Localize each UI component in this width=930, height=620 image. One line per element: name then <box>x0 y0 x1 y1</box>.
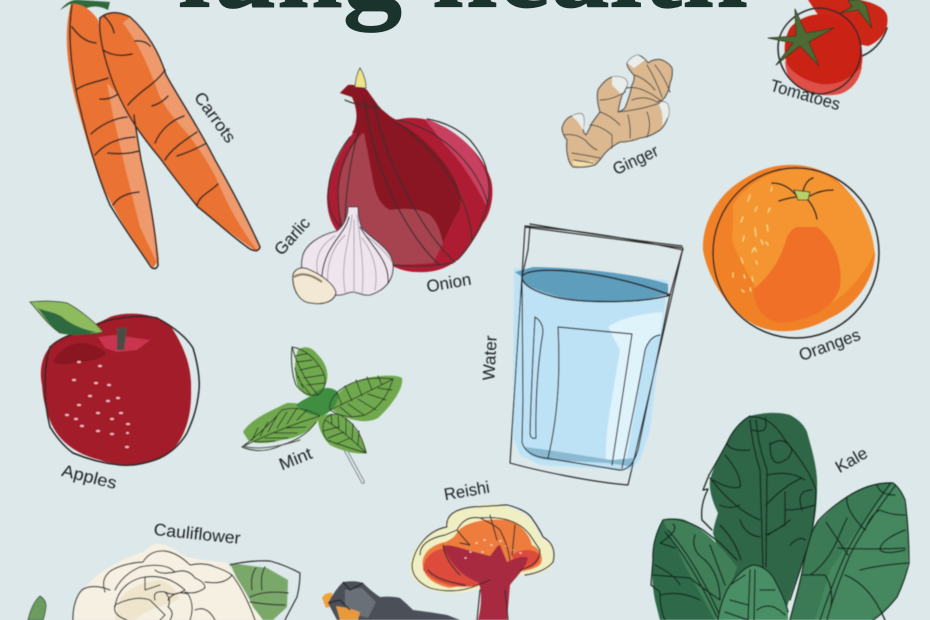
food: glass of water <box>479 224 683 485</box>
food: dark root <box>322 581 460 620</box>
label: Reishi: Reishi <box>443 478 491 504</box>
label: Kale: Kale <box>832 443 871 477</box>
food: tomatoes <box>768 0 887 114</box>
label: Oranges: Oranges <box>796 325 863 365</box>
food: kale <box>651 413 909 620</box>
calyx <box>768 9 834 66</box>
food: onion <box>327 68 492 296</box>
food: garlic <box>270 207 393 304</box>
food: apple <box>30 301 199 493</box>
food: orange <box>703 165 879 365</box>
label: Water: Water <box>479 335 501 381</box>
label: Tomatoes: Tomatoes <box>768 76 843 114</box>
label: Ginger: Ginger <box>610 141 662 179</box>
food: reishi mushroom <box>410 478 554 620</box>
small leaf at bottom-left <box>28 596 46 620</box>
label: Onion: Onion <box>425 270 473 296</box>
label: Garlic: Garlic <box>270 213 314 259</box>
label: Apples: Apples <box>60 461 119 493</box>
mint leaf edge <box>243 440 300 448</box>
label: Mint: Mint <box>276 444 315 474</box>
food: mint <box>242 347 402 482</box>
food: carrots <box>60 0 261 269</box>
food: ginger <box>562 55 672 179</box>
food: cauliflower <box>28 520 300 620</box>
onion tip <box>355 68 366 88</box>
label: Cauliflower: Cauliflower <box>153 520 242 548</box>
label: Carrots: Carrots <box>190 88 240 146</box>
